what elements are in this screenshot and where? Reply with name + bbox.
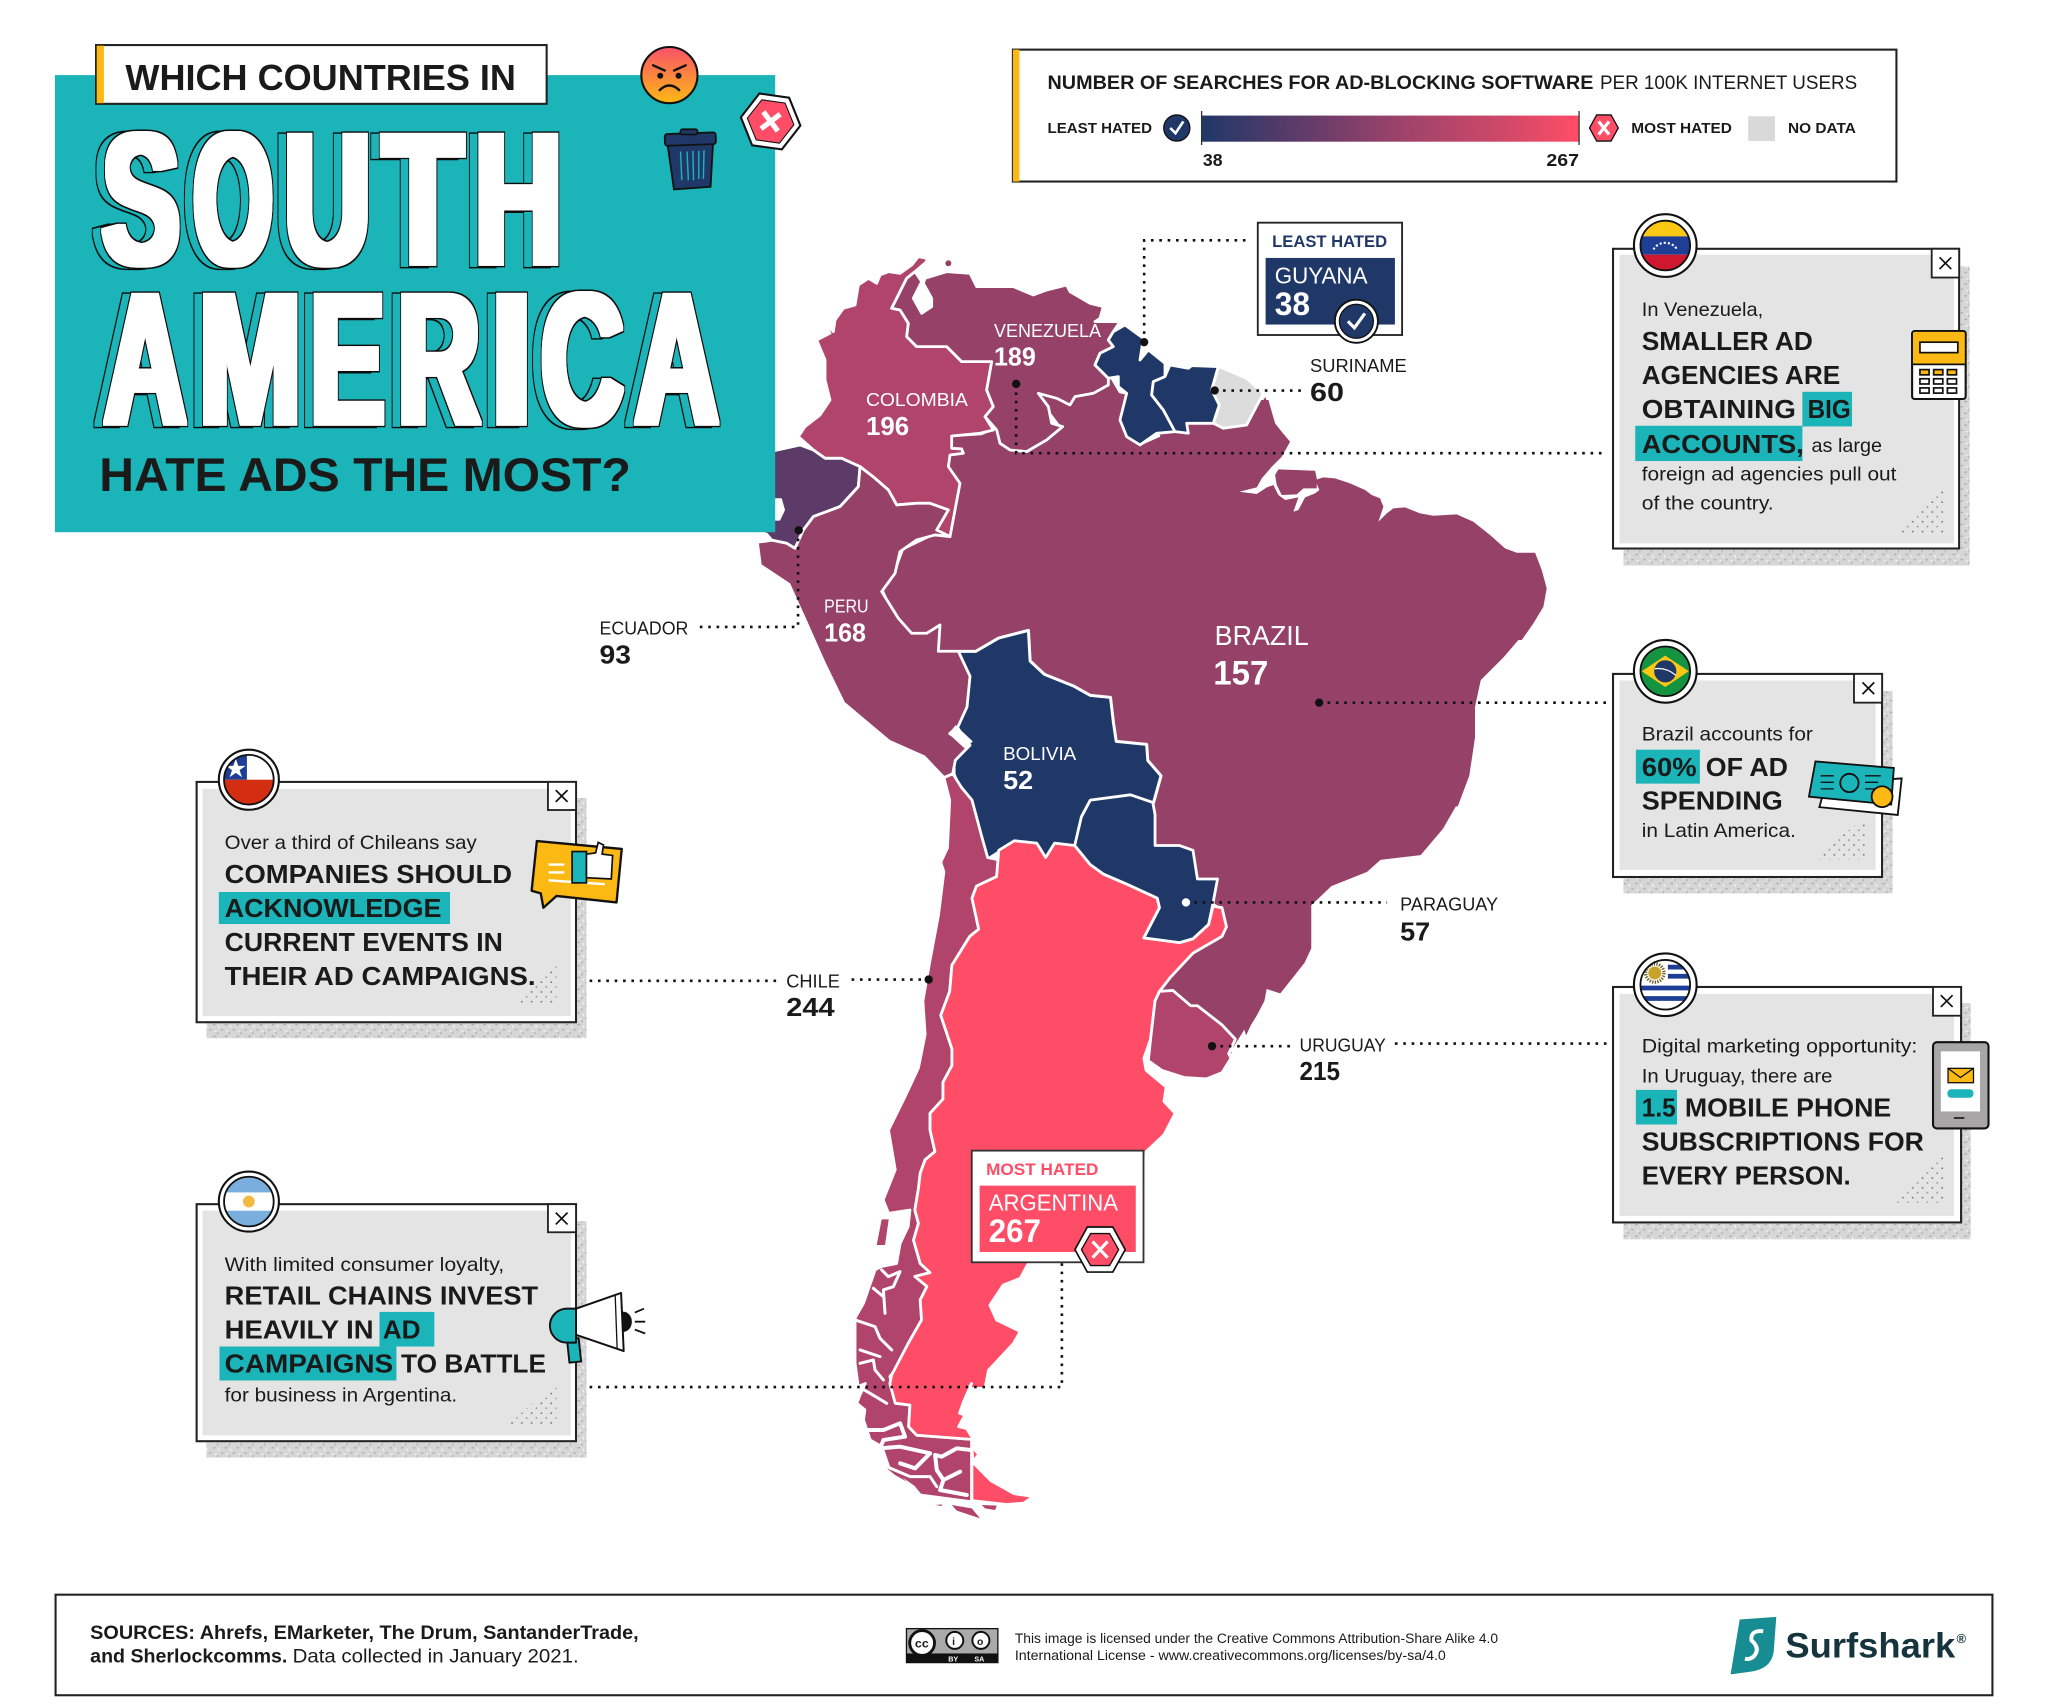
label: Ecuador: ECUADOR (600, 618, 688, 639)
venezuelan island (945, 260, 951, 266)
flag: Brazil (1634, 640, 1697, 703)
license text: International License - www.creativecommons.org/licenses/by-sa/4.0 (1015, 1648, 1446, 1663)
text block (1635, 299, 1897, 514)
label: Colombia: COLOMBIA (866, 389, 969, 410)
label: Paraguay (1400, 893, 1498, 946)
gulf of Guayaquil (775, 498, 785, 521)
creative commons badge: i (952, 1637, 955, 1648)
tierra del fuego, Argentina (973, 1451, 1030, 1503)
text block (219, 1254, 546, 1406)
icon: trash can (665, 129, 716, 189)
text block: 1.5 (1642, 1093, 1676, 1123)
map of South America (747, 257, 1547, 1518)
most hated key (1590, 115, 1732, 141)
label: Colombia (866, 389, 969, 441)
heading: South: O (193, 94, 273, 304)
legend (1013, 50, 1896, 182)
text block: OF AD (1706, 752, 1788, 782)
text block: for business in Argentina. (225, 1384, 457, 1406)
heading: South: U (284, 94, 371, 304)
country: French Guiana, no data (1212, 367, 1263, 428)
label: Venezuela: VENEZUELA (994, 320, 1102, 341)
text block: CURRENT EVENTS IN (225, 927, 503, 957)
callout: Guyana least hated: LEAST HATED (1272, 233, 1387, 251)
heading: America: M (199, 254, 302, 464)
heading: America: A (635, 254, 719, 464)
icon: check badge (1335, 300, 1378, 343)
sources: and Sherlockcomms. (90, 1646, 287, 1668)
flag: Uruguay (1634, 953, 1697, 1016)
text block: SPENDING (1642, 786, 1783, 816)
footer (56, 1595, 1992, 1695)
gradient scale: 38 (1203, 150, 1223, 170)
icon: megaphone (550, 1293, 645, 1363)
label: Venezuela: 189 (994, 342, 1036, 372)
label: Suriname: 60 (1310, 377, 1344, 407)
text block: Over a third of Chileans say (225, 832, 477, 854)
sources (90, 1622, 639, 1668)
icon: calculator (1912, 331, 1966, 399)
text block: SUBSCRIPTIONS FOR (1642, 1127, 1924, 1157)
label: Paraguay: 57 (1400, 916, 1430, 946)
text block: With limited consumer loyalty, (225, 1254, 504, 1276)
no data key: NO DATA (1788, 120, 1856, 137)
label: Ecuador (600, 618, 688, 669)
country: Paraguay (1075, 795, 1218, 943)
text block: BIG (1808, 394, 1851, 424)
icon: phone (1933, 1042, 1989, 1128)
label: Chile: CHILE (786, 970, 840, 991)
text block: Digital marketing opportunity: (1642, 1036, 1917, 1058)
legend title (1048, 72, 1857, 94)
heading: America: I (490, 254, 533, 464)
creative commons badge: SA (974, 1655, 984, 1663)
text block: of the country. (1642, 492, 1774, 514)
text block: Brazil accounts for (1642, 724, 1813, 746)
text block: as large (1812, 435, 1882, 457)
callout: Guyana least hated (1258, 223, 1402, 343)
callout: Guyana least hated: 38 (1275, 285, 1310, 322)
close button (1932, 249, 1959, 278)
callout: Argentina most hated: 267 (989, 1212, 1041, 1249)
creative commons badge (906, 1629, 998, 1663)
no data key (1748, 116, 1856, 141)
country: Guyana (1095, 325, 1175, 445)
text block (219, 832, 536, 991)
logo: Surfshark: ® (1957, 1631, 1967, 1646)
least hated key (1048, 115, 1190, 141)
callout: Guyana least hated: GUYANA (1275, 262, 1368, 288)
text block: RETAIL CHAINS INVEST (225, 1281, 538, 1311)
text block (1636, 1036, 1924, 1191)
logo: Surfshark: Surfshark (1785, 1626, 1956, 1665)
text block (1636, 724, 1813, 842)
text block: 60% (1642, 752, 1697, 782)
label: Ecuador: 93 (600, 639, 631, 669)
icon: angry face (641, 47, 697, 103)
most hated key: MOST HATED (1631, 120, 1732, 137)
text block: ACCOUNTS, (1642, 429, 1804, 459)
close button (548, 782, 576, 810)
label: Paraguay: PARAGUAY (1400, 893, 1498, 914)
creative commons badge: o (977, 1637, 983, 1648)
text block: THEIR AD CAMPAIGNS. (225, 961, 536, 991)
heading: America: R (397, 254, 480, 464)
label: Bolivia: BOLIVIA (1003, 743, 1077, 764)
country: Brazil (884, 379, 1547, 1054)
text block: CAMPAIGNS (225, 1349, 393, 1379)
panel: Uruguay (1613, 953, 1989, 1239)
callout: Argentina most hated: ARGENTINA (989, 1190, 1118, 1216)
label: Chile (786, 970, 840, 1022)
label: Peru (824, 596, 869, 647)
text block: In Venezuela, (1642, 299, 1763, 321)
callout: Argentina most hated (972, 1151, 1144, 1272)
chile fjords (855, 1270, 971, 1495)
label: Venezuela (994, 320, 1102, 372)
heading: hate ads the most: HATE ADS THE MOST? (99, 448, 631, 501)
text block: foreign ad agencies pull out (1642, 464, 1897, 486)
panel: Argentina (197, 1172, 645, 1458)
license text: This image is licensed under the Creative Commons Attribution-Share Alike 4.0 (1015, 1631, 1498, 1646)
leader lines (581, 240, 1606, 1387)
country: Peru (757, 467, 970, 778)
country: Bolivia (956, 630, 1161, 857)
label: Peru: PERU (824, 596, 869, 617)
label: Bolivia: 52 (1003, 765, 1033, 795)
text block: COMPANIES SHOULD (225, 859, 512, 889)
label: Brazil: BRAZIL (1215, 620, 1309, 651)
close button (1933, 987, 1961, 1016)
text block: HEAVILY IN (225, 1315, 374, 1345)
heading: America: C (541, 254, 623, 464)
heading: America: A (104, 254, 186, 464)
text block: OBTAINING (1642, 394, 1796, 424)
heading: America: E (310, 254, 385, 464)
heading: South: S (102, 94, 180, 304)
title panel (55, 45, 804, 532)
gradient scale: 267 (1546, 150, 1579, 170)
close button (1854, 674, 1882, 703)
label: Peru: 168 (824, 617, 866, 647)
creative commons badge: BY (948, 1655, 958, 1663)
text block: In Uruguay, there are (1642, 1066, 1833, 1088)
heading: which countries in: WHICH COUNTRIES IN (125, 57, 516, 98)
country: Venezuela (892, 272, 1120, 452)
label: Colombia: 196 (866, 411, 909, 441)
country: Uruguay (1148, 990, 1235, 1079)
text block: MOBILE PHONE (1685, 1093, 1891, 1123)
logo: Surfshark (1731, 1617, 1967, 1674)
heading: South: H (474, 94, 563, 304)
label: Bolivia (1003, 743, 1077, 795)
text block: AGENCIES ARE (1642, 360, 1840, 390)
license text (1015, 1631, 1498, 1663)
text block: AD (383, 1315, 421, 1345)
heading: South: T (382, 94, 463, 304)
legend title: PER 100K INTERNET USERS (1600, 72, 1857, 94)
text block: SMALLER AD (1642, 326, 1813, 356)
panel: Venezuela (1613, 214, 1970, 566)
icon: x badge (1075, 1227, 1125, 1272)
heading: which countries in (96, 45, 547, 104)
icon: thumbs up speech bubble (532, 841, 622, 908)
label: Suriname: SURINAME (1310, 355, 1407, 376)
text block: EVERY PERSON. (1642, 1161, 1851, 1191)
chile southern islands (877, 1219, 997, 1518)
legend title: NUMBER OF SEARCHES FOR AD-BLOCKING SOFTWARE (1048, 72, 1593, 94)
gradient scale (1202, 111, 1579, 170)
country: Colombia (798, 257, 993, 537)
text block: TO BATTLE (401, 1349, 546, 1379)
label: Chile: 244 (786, 992, 835, 1022)
label: Brazil (1213, 620, 1309, 692)
country: Suriname (1152, 365, 1219, 433)
label: Uruguay: 215 (1300, 1056, 1340, 1086)
close button (548, 1204, 576, 1232)
callout: Argentina most hated: MOST HATED (986, 1161, 1099, 1179)
icon: hexagon block (737, 91, 804, 152)
country: Ecuador (747, 445, 860, 548)
label: Brazil: 157 (1213, 654, 1268, 692)
flag: Argentina (219, 1172, 279, 1232)
amazon delta and coastal details (949, 450, 1360, 1056)
flag: Venezuela (1634, 214, 1697, 277)
text block: ACKNOWLEDGE (225, 893, 442, 923)
icon: money (1809, 761, 1902, 815)
least hated key: LEAST HATED (1048, 120, 1152, 137)
sources: SOURCES: Ahrefs, EMarketer, The Drum, SantanderTrade, (90, 1622, 639, 1644)
country: Argentina (890, 841, 1226, 1440)
label: Uruguay: URUGUAY (1300, 1034, 1386, 1055)
label: Uruguay (1300, 1034, 1386, 1086)
panel: Brazil (1613, 640, 1902, 893)
text block: in Latin America. (1642, 820, 1796, 842)
label: Suriname (1310, 355, 1407, 407)
flag: Chile (219, 750, 279, 810)
creative commons badge: cc (915, 1637, 929, 1651)
country: Chile (855, 774, 999, 1502)
sources: Data collected in January 2021. (293, 1646, 579, 1668)
panel: Chile (197, 750, 622, 1038)
